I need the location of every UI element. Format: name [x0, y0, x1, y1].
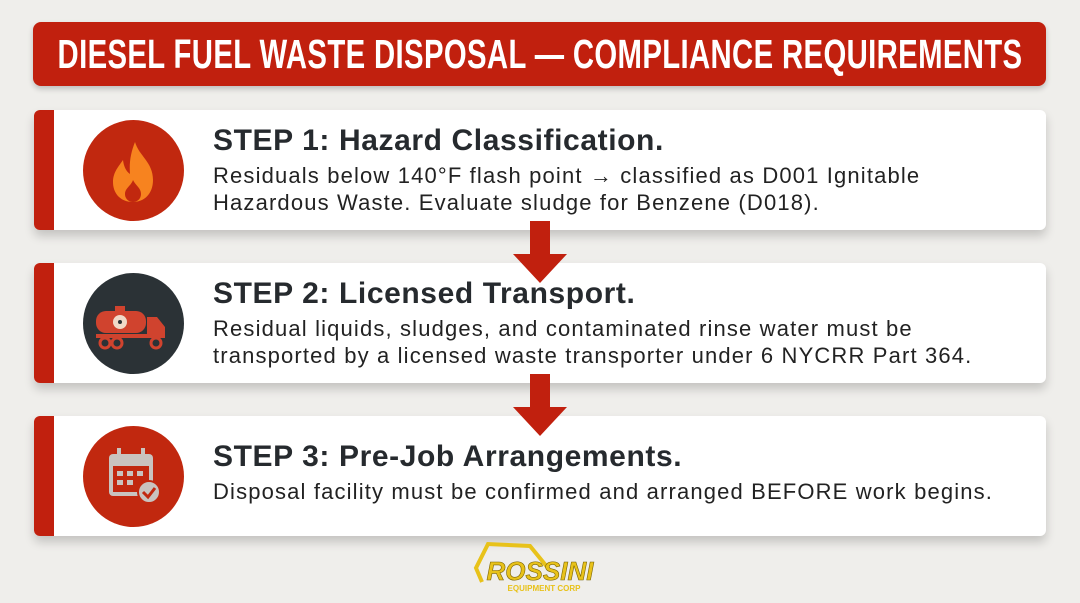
text: step 1	[213, 124, 920, 215]
panel: step 1	[34, 110, 1046, 230]
logo: EQUIPMENT CORP	[508, 584, 581, 593]
text: step 3: STEP 3: Pre-Job Arrangements.	[213, 440, 682, 473]
text: step 1: Residuals below 140°F flash point → classified as D001 Ignitable	[213, 163, 920, 188]
title: DIESEL FUEL WASTE DISPOSAL — COMPLIANCE REQUIREMENTS	[57, 31, 1022, 77]
text: step 2: Residual liquids, sludges, and contaminated rinse water must be	[213, 316, 913, 341]
text: step 3	[213, 440, 993, 504]
text: step 2	[213, 277, 972, 368]
arrow 2	[513, 374, 567, 436]
logo	[474, 542, 594, 593]
text: step 2: transported by a licensed waste transporter under 6 NYCRR Part 364.	[213, 343, 972, 368]
icon: tanker truck	[83, 273, 184, 374]
icon: flame	[83, 120, 184, 221]
text: step 1: Hazardous Waste. Evaluate sludge for Benzene (D018).	[213, 190, 820, 215]
logo: ROSSINI	[487, 556, 594, 586]
text: step 1: STEP 1: Hazard Classification.	[213, 124, 664, 157]
icon: calendar	[83, 426, 184, 527]
arrow 1	[513, 221, 567, 283]
text: step 2: STEP 2: Licensed Transport.	[213, 277, 635, 310]
title	[33, 22, 1046, 86]
panel: step 3	[34, 416, 1046, 536]
text: step 3: Disposal facility must be confirmed and arranged BEFORE work begins.	[213, 479, 993, 504]
panel: step 2	[34, 263, 1046, 383]
